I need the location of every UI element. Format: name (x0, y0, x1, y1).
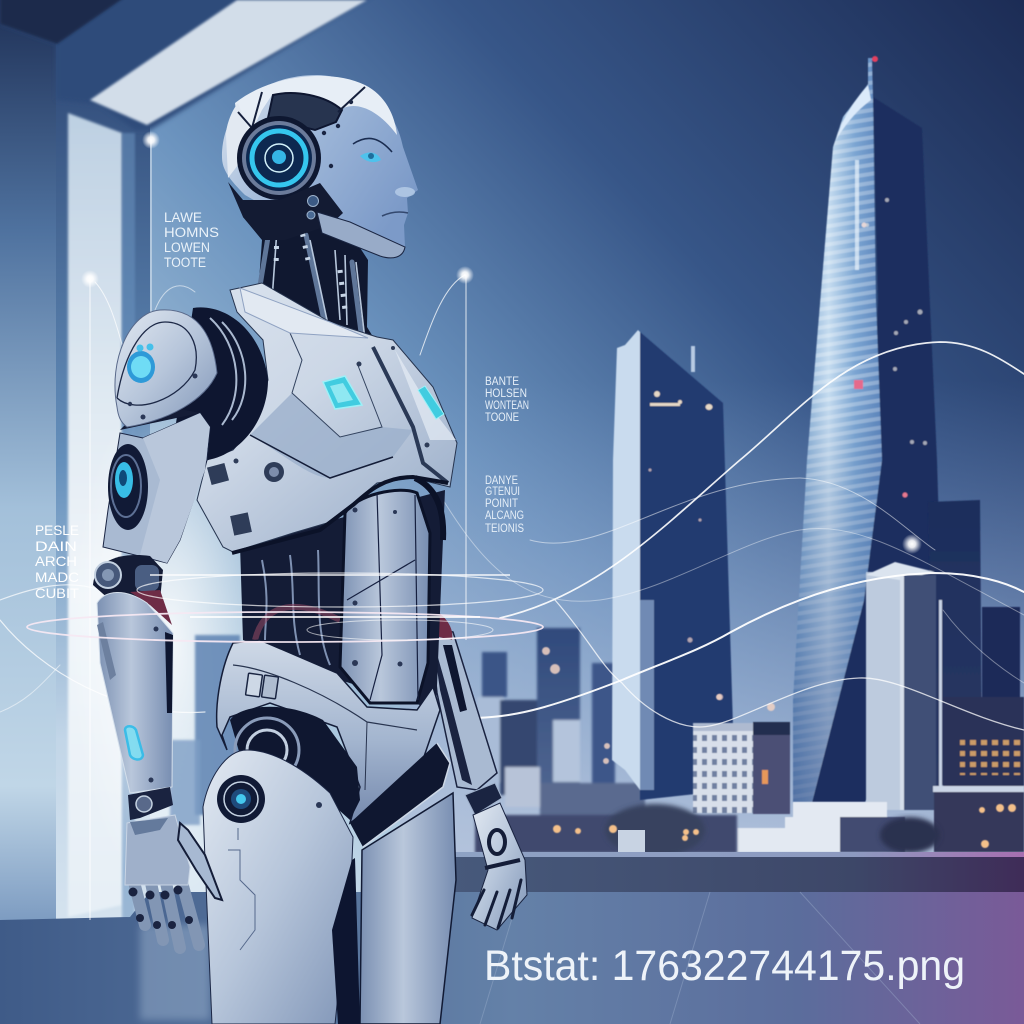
right side city blocks (693, 500, 1024, 852)
callout label: top left: LAWE (164, 210, 202, 225)
knee disc (217, 775, 265, 823)
forearm light icon (125, 726, 143, 760)
file name caption: Btstat: 176322744175.png (484, 942, 965, 990)
callout label: center lower: DANYE (485, 475, 518, 487)
robot: left thigh (203, 750, 360, 1024)
jaw plate (317, 212, 405, 258)
robot: left shoulder cap (115, 310, 217, 427)
robot: elbow joint (93, 555, 172, 625)
callout label: top left: HOMNS (164, 225, 219, 240)
robot: back arm and right hand (425, 605, 527, 930)
chest light panels (323, 376, 444, 419)
callout label: center lower: POINIT (485, 498, 518, 510)
mid skyscraper (612, 330, 733, 800)
main glass tower (793, 56, 940, 802)
callout label: top left: LOWEN (164, 240, 210, 255)
callout label: center lower: GTENUI (485, 486, 520, 498)
robot: upper left arm (103, 408, 210, 563)
flowing data light curves (0, 275, 1024, 730)
trees and street lights (475, 647, 1016, 856)
robot: chest armor (197, 283, 457, 553)
robot: head (222, 75, 418, 258)
robot: left forearm (97, 592, 173, 793)
callout label: center upper: HOLSEN (485, 388, 527, 400)
callout label: center upper: WONTEAN (485, 400, 529, 412)
robot: right thigh (360, 793, 456, 1024)
callout label: center upper: BANTE (485, 376, 519, 388)
robot: waist mechanics (240, 490, 445, 710)
vertical callout lines with glowing nodes (81, 131, 922, 920)
callout label: lower left: CUBIT (35, 585, 79, 601)
eye and brow (353, 138, 392, 162)
callout label: center lower: ALCANG (485, 510, 524, 522)
robot: left hand (125, 787, 222, 948)
callout label: top left: TOOTE (164, 255, 206, 270)
robot: pelvis (217, 640, 450, 847)
robot: left arm shoulder joint (175, 307, 268, 460)
callout label: lower left: ARCH (35, 553, 77, 569)
ear disc sensor (237, 116, 321, 200)
callout label: center upper: TOONE (485, 412, 519, 424)
callout label: lower left: PESLE (35, 522, 79, 538)
robot: neck cables (243, 200, 378, 345)
room walls and window frame (0, 0, 385, 925)
floor and terrace ledge (0, 852, 1024, 1024)
callout label: lower left: DAIN (35, 538, 77, 554)
arm ring sensor (108, 444, 148, 530)
far skyline buildings (170, 628, 645, 825)
callout label: lower left: MADC (35, 569, 79, 585)
holographic rings around waist (27, 573, 543, 642)
callout label: center lower: TEIONIS (485, 523, 524, 535)
